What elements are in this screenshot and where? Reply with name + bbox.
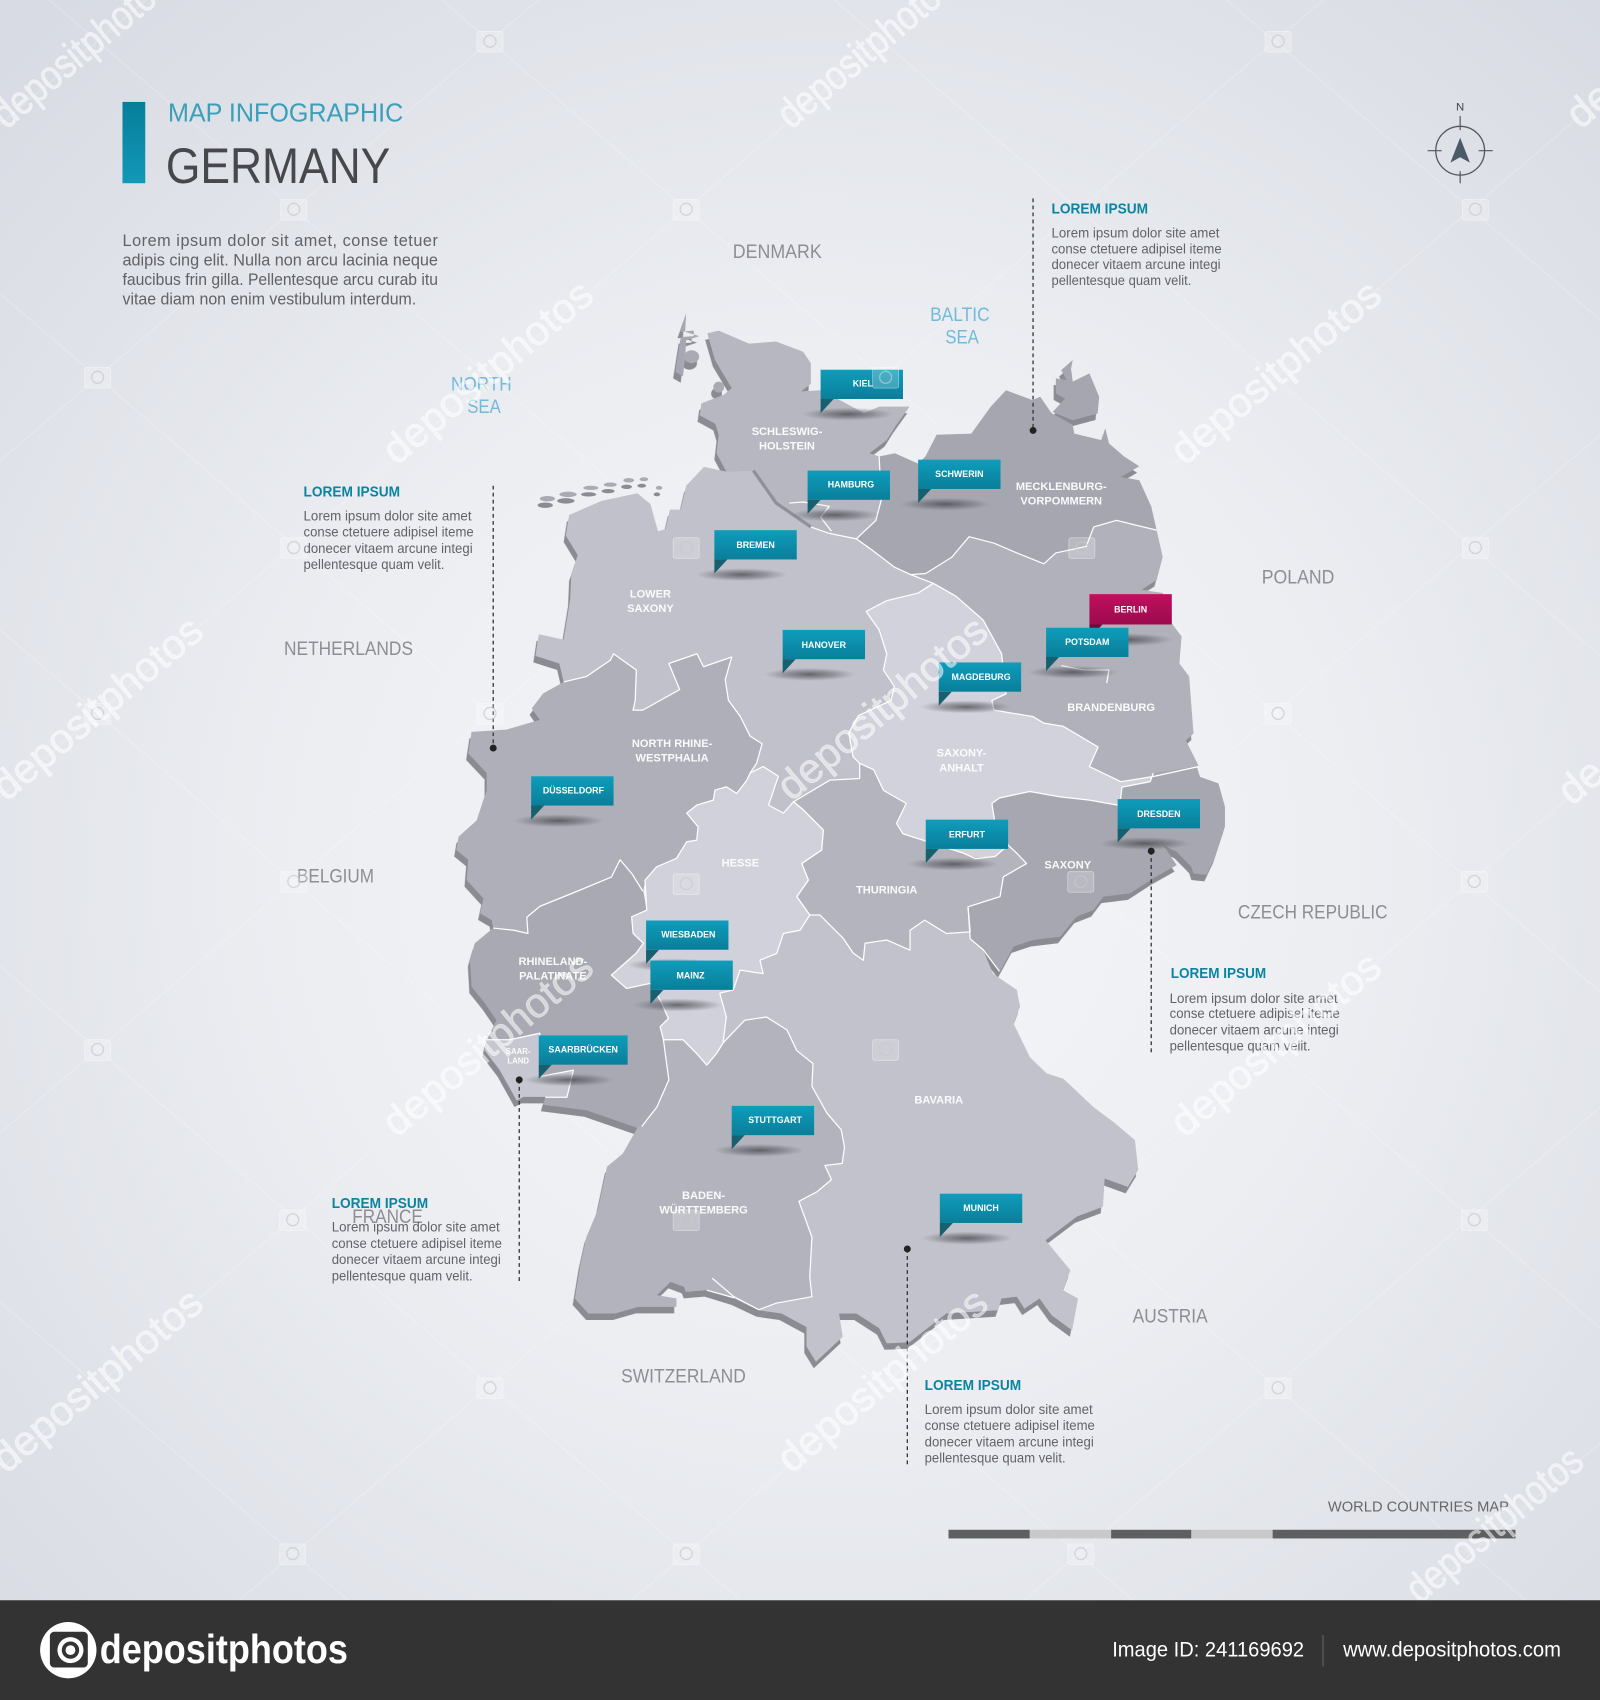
label: Schleswig-Holstein: HOLSTEIN: [759, 440, 815, 452]
callout: east: pellentesque quam velit.: [1170, 1039, 1311, 1054]
flag: Hanover: HANOVER: [802, 640, 847, 650]
flag: Mainz: [632, 961, 733, 1012]
flag: Wiesbaden: WIESBADEN: [661, 929, 715, 939]
accent bar: [122, 102, 145, 183]
label: Mecklenburg-Vorpommern: VORPOMMERN: [1020, 496, 1102, 508]
state: Bavaria: [720, 915, 1138, 1362]
label: Netherlands: NETHERLANDS: [284, 639, 413, 660]
callout: north-west: LOREM IPSUM: [304, 485, 400, 501]
river Elbe: [753, 471, 811, 527]
callout: south: Lorem ipsum dolor site amet: [925, 1402, 1093, 1417]
flag: Kiel: [802, 370, 903, 421]
callout: north-west: Lorem ipsum dolor site amet: [304, 508, 472, 523]
callout: east: conse ctetuere adipisel iteme: [1170, 1006, 1340, 1021]
state labels: [506, 426, 1155, 1217]
label: Belgium: BELGIUM: [297, 867, 374, 888]
flag: Mainz: MAINZ: [676, 970, 705, 980]
label: Brandenburg: BRANDENBURG: [1067, 702, 1155, 714]
callout: south: donecer vitaem arcune integi: [925, 1434, 1094, 1449]
flag: Schwerin: SCHWERIN: [935, 469, 984, 479]
flag: Potsdam: POTSDAM: [1065, 637, 1109, 647]
icon: compass: [1428, 102, 1493, 183]
label: France: FRANCE: [352, 1207, 423, 1228]
callout: south: pellentesque quam velit.: [925, 1451, 1066, 1466]
flag: Saarbrucken: [524, 1035, 628, 1086]
state borders: [487, 456, 1199, 1310]
island: Sylt: [675, 313, 699, 376]
watermark overlay: depositphotos: [768, 607, 996, 809]
callout: north-east: donecer vitaem arcune integi: [1051, 257, 1221, 272]
watermark overlay: depositphotos: [1161, 271, 1390, 473]
callout: east: Lorem ipsum dolor site amet: [1170, 991, 1338, 1006]
flag: Magdeburg: MAGDEBURG: [951, 672, 1011, 682]
flag: Dresden: [1099, 799, 1200, 850]
callout: south-west: LOREM IPSUM: [332, 1196, 428, 1212]
intro paragraph: faucibus frin gilla. Pellentesque arcu curab itu: [122, 271, 438, 289]
label: Switzerland: SWITZERLAND: [621, 1366, 746, 1387]
scale caption: WORLD COUNTRIES MAP: [1328, 1498, 1509, 1515]
state: Brandenburg: [910, 520, 1199, 782]
title block: [122, 97, 403, 194]
state: Mecklenburg-Vorpommern: [856, 390, 1157, 575]
neighbouring countries and seas: [284, 242, 1388, 1387]
label: North Sea: NORTH: [451, 374, 512, 395]
callout: south: [904, 1246, 1095, 1466]
title: GERMANY: [166, 138, 390, 194]
callout: north-east: Lorem ipsum dolor site amet: [1051, 225, 1220, 240]
flag: Potsdam: [1028, 628, 1128, 679]
flag: Stuttgart: [713, 1106, 814, 1157]
icon: compass: N: [1456, 102, 1464, 114]
label: Baltic Sea: BALTIC: [930, 305, 990, 326]
callout: north-east: [1030, 198, 1222, 434]
callout: north-west: conse ctetuere adipisel iteme: [304, 525, 474, 540]
label: Lower Saxony: LOWER: [630, 588, 671, 600]
label: Saxony-Anhalt: SAXONY-: [937, 748, 986, 760]
callout: south-west: conse ctetuere adipisel iteme: [332, 1236, 502, 1251]
state: Thuringia: [793, 763, 1027, 960]
state: Saarland: [485, 1033, 573, 1100]
callout: north-east: conse ctetuere adipisel iteme: [1051, 242, 1222, 257]
flag: Berlin: BERLIN: [1114, 605, 1147, 615]
callout: south-west: Lorem ipsum dolor site amet: [332, 1220, 500, 1235]
label: North Rhine-Westphalia: NORTH RHINE-: [632, 738, 712, 750]
label: Lower Saxony: SAXONY: [627, 603, 674, 615]
callout: south-west: [332, 1076, 523, 1283]
callout: north-west: [304, 485, 497, 752]
callout: north-west: donecer vitaem arcune integi: [304, 541, 473, 556]
callout: south: LOREM IPSUM: [925, 1378, 1021, 1394]
flag: Dresden: DRESDEN: [1137, 809, 1181, 819]
logo wordmark: depositphotos: [100, 1626, 348, 1672]
label: Thuringia: THURINGIA: [856, 884, 917, 896]
label: Rhineland-Palatinate: RHINELAND-: [518, 956, 587, 968]
island: Rugen: [1053, 360, 1099, 420]
icon: depositphotos logo: [40, 1622, 96, 1678]
scale bar: [949, 1498, 1515, 1538]
flag: Schwerin: [900, 460, 1001, 511]
label: Baltic Sea: [930, 305, 990, 349]
callout: north-east: LOREM IPSUM: [1051, 202, 1148, 218]
flag: Kiel: KIEL: [853, 379, 874, 389]
intro paragraph: adipis cing elit. Nulla non arcu lacinia neque: [122, 252, 438, 270]
label: Baden-Wurttemberg: WÜRTTEMBERG: [659, 1204, 748, 1217]
flag: Dusseldorf: [513, 776, 614, 827]
state: Baden-Wurttemberg: [575, 1017, 844, 1313]
flag: Dusseldorf: DÜSSELDORF: [543, 786, 605, 796]
callout: east: LOREM IPSUM: [1171, 966, 1266, 982]
image id: Image ID: 241169692: [1112, 1639, 1304, 1662]
kicker: MAP INFOGRAPHIC: [168, 97, 403, 127]
intro paragraph: vitae diam non enim vestibulum interdum.: [122, 291, 416, 309]
state: Hesse: [611, 767, 823, 1065]
state: Lower Saxony: [536, 467, 933, 813]
state: Saxony: [968, 767, 1225, 971]
label: Austria: AUSTRIA: [1133, 1307, 1208, 1328]
flag: Hanover: [764, 630, 865, 681]
map of Germany: [456, 313, 1225, 1362]
intro paragraph: Lorem ipsum dolor sit amet, conse tetuer: [122, 232, 439, 250]
callout: east: donecer vitaem arcune integi: [1170, 1022, 1339, 1037]
watermark overlay: depositphotos: [373, 943, 602, 1145]
state: North Rhine-Westphalia: [456, 653, 762, 933]
flag: Bremen: BREMEN: [736, 540, 775, 550]
flag: Munich: MUNICH: [963, 1203, 999, 1213]
state: Schleswig-Holstein: [700, 331, 909, 539]
label: Czech Republic: CZECH REPUBLIC: [1238, 902, 1388, 923]
label: Hesse: HESSE: [722, 857, 759, 869]
label: Schleswig-Holstein: SCHLESWIG-: [752, 426, 822, 438]
label: Poland: POLAND: [1262, 567, 1334, 588]
flag: Hamburg: [789, 471, 890, 521]
label: North Sea: SEA: [467, 397, 501, 418]
state: Rhineland-Palatinate: [470, 860, 669, 1129]
islands: Frisian: [540, 350, 724, 501]
watermark overlay: depositphotos: [768, 1279, 996, 1481]
label: Bavaria: BAVARIA: [914, 1095, 963, 1107]
label: Baltic Sea: SEA: [945, 328, 979, 349]
flag: Erfurt: [907, 820, 1008, 871]
label: North Rhine-Westphalia: WESTPHALIA: [636, 753, 709, 765]
watermark overlay: depositphotos: [1161, 943, 1390, 1145]
flag: Berlin: [1082, 594, 1173, 646]
watermark overlay: depositphotos: [373, 271, 602, 473]
flag: Magdeburg: [920, 662, 1021, 713]
flag: Wiesbaden: [628, 920, 728, 971]
callout: north-east: pellentesque quam velit.: [1051, 273, 1191, 288]
state: Saxony-Anhalt: [849, 583, 1155, 858]
callout: east: [1148, 848, 1340, 1054]
callout: south: conse ctetuere adipisel iteme: [925, 1418, 1095, 1433]
website: www.depositphotos.com: [1342, 1639, 1561, 1662]
label: Rhineland-Palatinate: PALATINATE: [519, 971, 587, 983]
label: Saarland: LAND: [507, 1057, 529, 1066]
flag: Hamburg: HAMBURG: [828, 479, 874, 489]
callout: south-west: donecer vitaem arcune integi: [332, 1252, 501, 1267]
label: Saarland: SAAR-: [506, 1047, 531, 1056]
flag: Stuttgart: STUTTGART: [748, 1115, 803, 1125]
flag: Munich: [921, 1194, 1022, 1245]
flag: Saarbrucken: SAARBRÜCKEN: [548, 1045, 618, 1055]
footer band: [0, 1600, 1600, 1700]
callout: south-west: pellentesque quam velit.: [332, 1268, 473, 1283]
intro paragraph: [122, 232, 439, 309]
label: Baden-Wurttemberg: BADEN-: [682, 1190, 725, 1202]
land with extruded edge: [456, 313, 1225, 1362]
label: North Sea: [451, 374, 512, 418]
label: Saxony-Anhalt: ANHALT: [939, 762, 984, 774]
label: Saxony: SAXONY: [1044, 859, 1092, 871]
callout: north-west: pellentesque quam velit.: [304, 557, 444, 572]
label: Denmark: DENMARK: [733, 242, 822, 263]
flag: Bremen: [696, 530, 797, 581]
label: Mecklenburg-Vorpommern: MECKLENBURG-: [1016, 481, 1107, 493]
city flags: [513, 370, 1200, 1245]
flag: Erfurt: ERFURT: [949, 830, 986, 840]
